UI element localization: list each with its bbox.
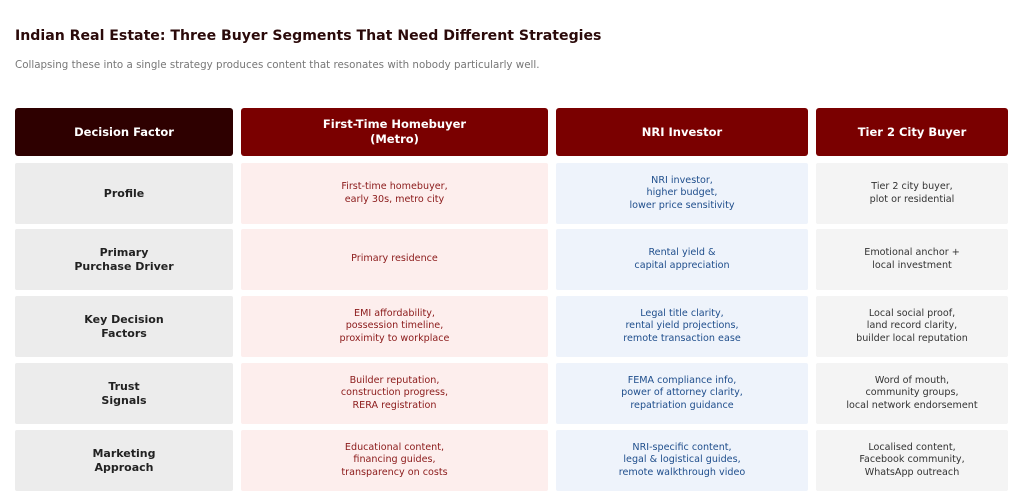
row: marketing approach: WhatsApp outreach	[865, 467, 959, 478]
row: trust signals: FEMA compliance info,	[628, 375, 736, 386]
row: profile: First-time homebuyer,	[341, 181, 448, 192]
row: primary purchase driver: Purchase Driver	[74, 260, 174, 272]
header: tier 2 city buyer	[816, 108, 1008, 156]
row: marketing approach	[15, 430, 1008, 491]
header: first-time homebuyer: (Metro)	[370, 132, 419, 146]
row: primary purchase driver: local investment	[872, 260, 952, 270]
row: key decision factors: Factors	[101, 326, 147, 340]
row: marketing approach: NRI-specific content,	[632, 442, 732, 453]
row: marketing approach: transparency on costs	[341, 467, 448, 478]
row: trust signals: Word of mouth,	[875, 375, 949, 386]
row: profile: early 30s, metro city	[345, 194, 444, 204]
row: marketing approach: Marketing	[92, 446, 156, 460]
row: profile: higher budget,	[647, 187, 717, 198]
row: key decision factors: EMI affordability,	[354, 308, 435, 319]
header: first-time homebuyer	[241, 108, 548, 156]
row: trust signals: RERA registration	[353, 400, 436, 411]
header: decision factor	[15, 108, 233, 156]
title: Indian Real Estate: Three Buyer Segments That Need Different Strategies	[15, 28, 601, 44]
header: tier 2 city buyer: Tier 2 City Buyer	[858, 124, 966, 138]
row: trust signals: power of attorney clarity,	[621, 387, 743, 398]
row: key decision factors: possession timeline,	[346, 320, 443, 331]
row: profile: plot or residential	[870, 194, 954, 204]
row: trust signals: construction progress,	[341, 387, 448, 398]
row: profile	[15, 163, 1008, 224]
row: marketing approach: remote walkthrough video	[619, 467, 745, 478]
header: decision factor: Decision Factor	[74, 124, 174, 138]
row: marketing approach: legal & logistical guides,	[623, 454, 741, 465]
row: trust signals: repatriation guidance	[630, 400, 734, 411]
row: profile: Tier 2 city buyer,	[871, 181, 953, 192]
row: key decision factors: builder local reputation	[856, 333, 968, 344]
row: key decision factors: rental yield projections,	[625, 320, 739, 331]
row: trust signals: community groups,	[865, 387, 959, 398]
header: NRI investor: NRI Investor	[642, 124, 722, 138]
row: marketing approach: financing guides,	[353, 454, 436, 465]
row: trust signals: Trust	[108, 380, 140, 392]
row: key decision factors: remote transaction ease	[623, 333, 741, 344]
row: key decision factors: Key Decision	[84, 312, 164, 326]
row: trust signals	[15, 363, 1008, 424]
row: key decision factors: Legal title clarity,	[640, 308, 724, 319]
row: key decision factors	[15, 296, 1008, 357]
subtitle: Collapsing these into a single strategy produces content that resonates with nobody particularly well.	[15, 59, 540, 71]
row: primary purchase driver: Rental yield &	[648, 247, 716, 258]
row: marketing approach: Approach	[94, 460, 154, 474]
row: marketing approach: Facebook community,	[859, 454, 965, 465]
row: key decision factors: land record clarity,	[867, 320, 957, 331]
header: first-time homebuyer: First-Time Homebuyer	[323, 117, 466, 131]
row: profile: NRI investor,	[651, 175, 713, 186]
row: profile: lower price sensitivity	[629, 200, 735, 211]
row: primary purchase driver: Emotional anchor +	[864, 247, 960, 258]
row: primary purchase driver	[15, 229, 1008, 290]
row: primary purchase driver: Primary	[100, 246, 148, 258]
row: key decision factors: Local social proof,	[869, 308, 955, 319]
row: profile: Profile	[104, 186, 144, 200]
row: marketing approach: Localised content,	[868, 442, 956, 453]
row: trust signals: local network endorsement	[846, 400, 978, 411]
row: trust signals: Signals	[101, 394, 147, 406]
header: NRI investor	[556, 108, 808, 156]
row: key decision factors: proximity to workplace	[340, 333, 449, 344]
row: primary purchase driver: Primary residence	[351, 253, 438, 264]
row: marketing approach: Educational content,	[345, 442, 444, 453]
row: primary purchase driver: capital appreciation	[634, 260, 730, 270]
row: trust signals: Builder reputation,	[350, 375, 439, 386]
